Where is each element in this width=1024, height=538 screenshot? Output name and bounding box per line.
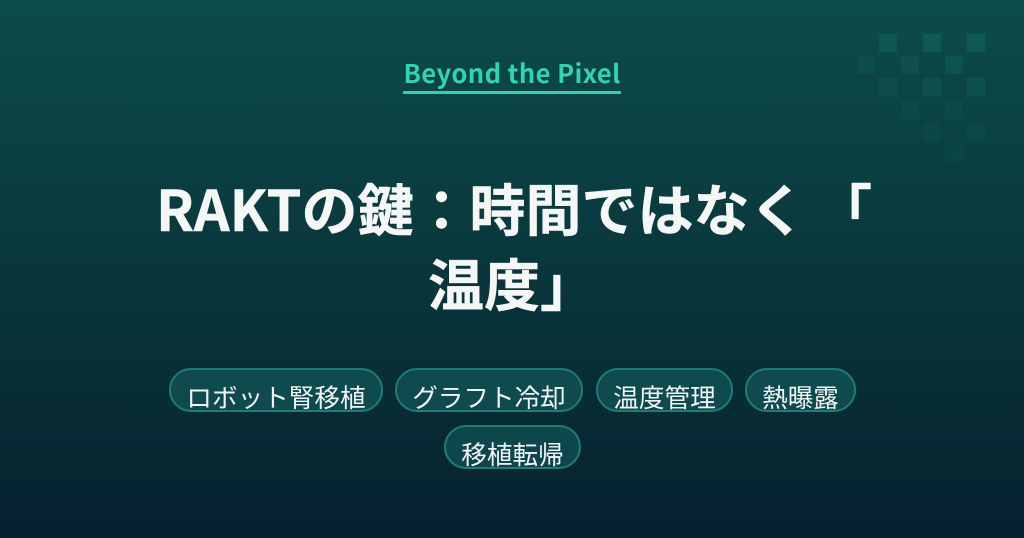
tag: 熱曝露 [745,368,856,412]
title: 「 [816,167,872,248]
title: RAKTの鍵：時間ではなく [156,167,806,248]
title: 温度」 [428,242,596,323]
tag: グラフト冷却 [395,368,583,412]
tag: 移植転帰 [444,425,581,469]
decorative pixel grid icon [879,34,985,96]
title [156,167,872,323]
tag: 温度管理 [596,368,733,412]
tag: ロボット腎移植 [169,368,383,412]
brand label: Beyond the Pixel: Beyond the Pixel [403,54,621,91]
